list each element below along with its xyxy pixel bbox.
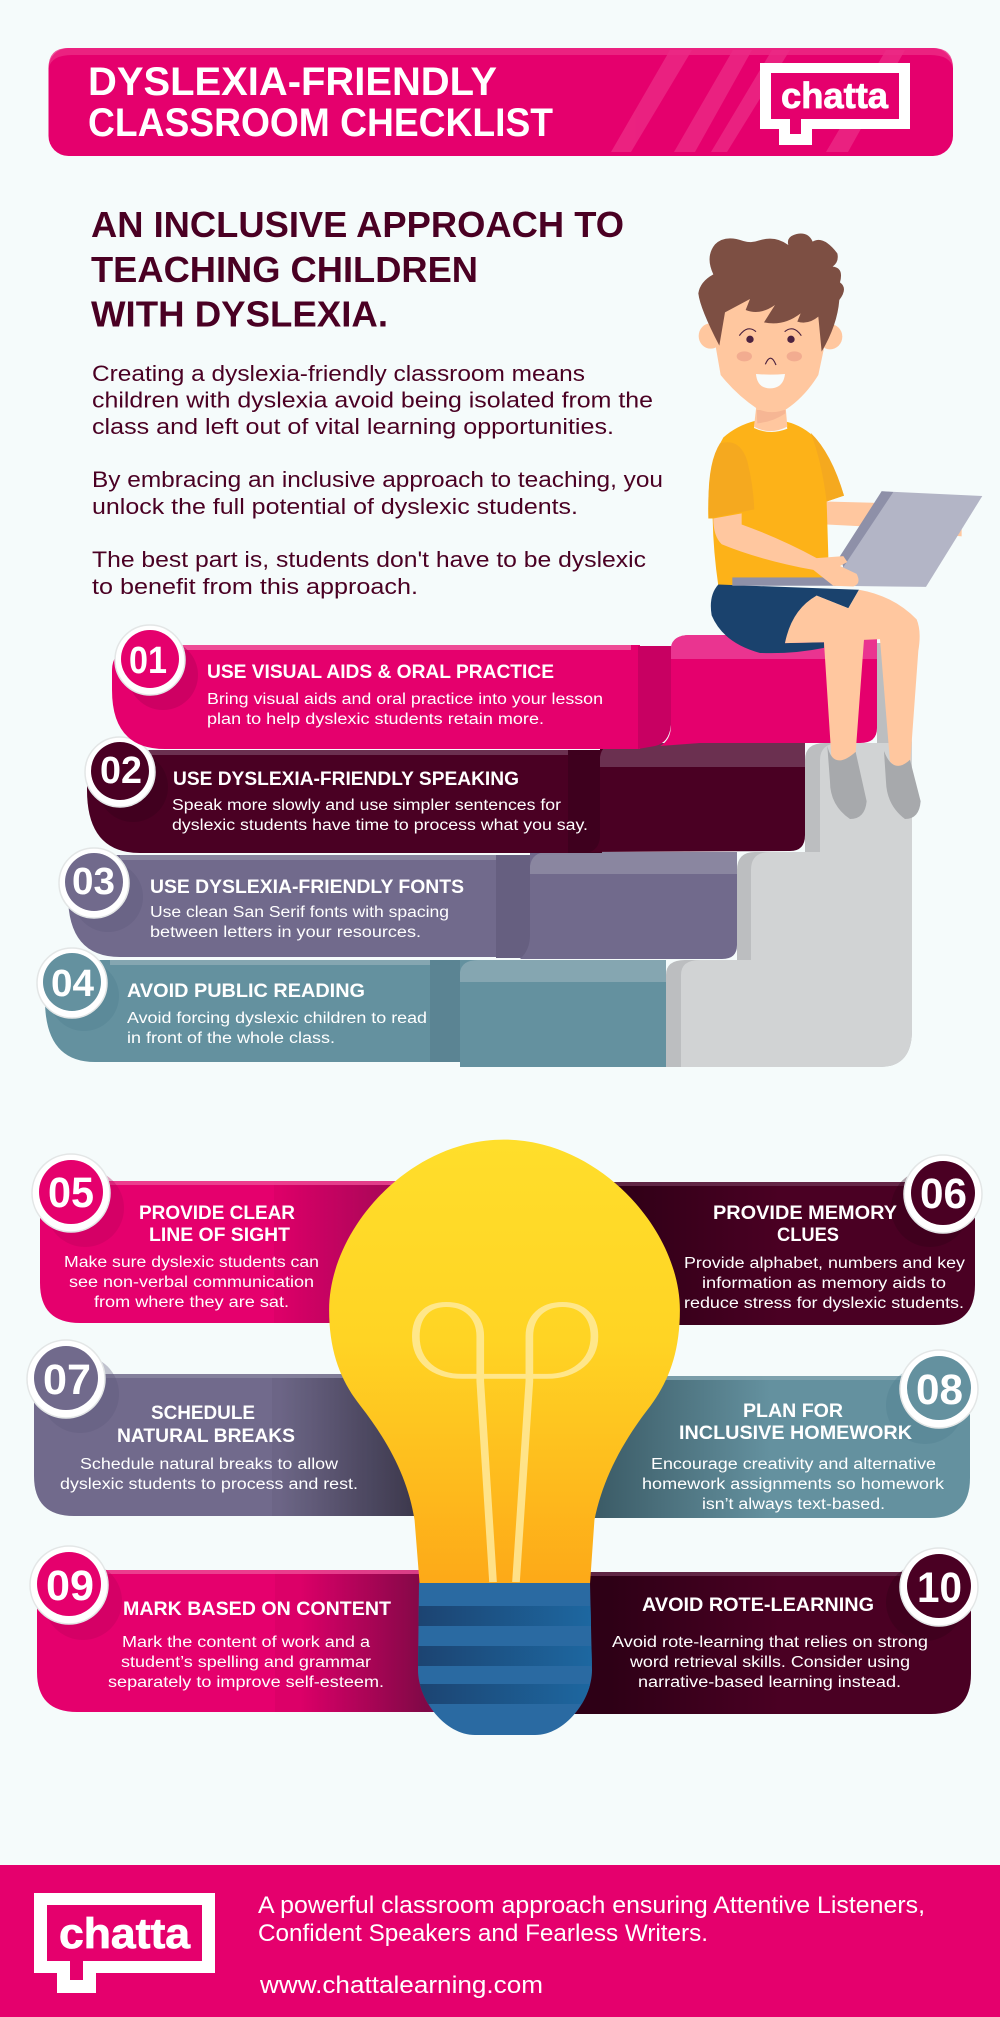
intro text: to benefit from this approach. [92, 574, 418, 599]
panel 08 text: Encourage creativity and alternative [651, 1456, 936, 1473]
panel 09 text: separately to improve self-esteem. [108, 1674, 384, 1691]
panel 10 text: AVOID ROTE-LEARNING [642, 1595, 874, 1616]
panel 09 text: Mark the content of work and a [122, 1634, 370, 1651]
step 01 text: plan to help dyslexic students retain more. [207, 711, 544, 728]
step 01 text [207, 662, 603, 728]
intro text: children with dyslexia avoid being isolated from the [92, 388, 653, 412]
chatta logo in banner [760, 63, 910, 145]
step 02: dyslexia-friendly speaking [85, 737, 805, 853]
panel 08 text [642, 1401, 944, 1513]
panel 07 text: NATURAL BREAKS [117, 1426, 295, 1447]
number badge 08: 08 [916, 1366, 963, 1414]
number badge 10: 10 [917, 1564, 962, 1612]
step 03: dyslexia-friendly fonts [59, 848, 737, 959]
panel 10: avoid rote-learning [560, 1548, 978, 1714]
number badge 02 [85, 737, 168, 822]
panel 07: natural breaks [27, 1340, 440, 1516]
main heading: TEACHING CHILDREN [91, 249, 478, 290]
step 02 text: Speak more slowly and use simpler sentences for [172, 797, 561, 814]
panel 05 text: Make sure dyslexic students can [64, 1254, 319, 1271]
panel 10 text: word retrieval skills. Consider using [629, 1654, 910, 1671]
panel 06 text: PROVIDE MEMORY [713, 1203, 897, 1224]
number badge 09 [30, 1546, 122, 1640]
panel 09: mark based on content [30, 1546, 450, 1712]
panel 06 text: Provide alphabet, numbers and key [684, 1255, 965, 1272]
number badge 06 [891, 1155, 982, 1247]
intro text: By embracing an inclusive approach to teaching, you [92, 467, 663, 492]
bulb glass [329, 1140, 680, 1585]
number badge 06: 06 [920, 1170, 967, 1218]
header banner [48, 48, 953, 156]
number badge 02: 02 [100, 750, 142, 792]
footer website: www.chattalearning.com [259, 1972, 543, 1999]
chatta logo in banner: chatta [781, 75, 889, 116]
panel 08: inclusive homework [560, 1350, 978, 1518]
step 01: visual aids and oral practice [112, 625, 877, 749]
boy illustration [698, 234, 982, 819]
panel 06 text: reduce stress for dyslexic students. [684, 1295, 964, 1312]
intro text: Creating a dyslexia-friendly classroom means [92, 361, 585, 386]
footer tagline [258, 1892, 925, 1947]
number badge 01 [115, 625, 198, 710]
panel 09 text: student’s spelling and grammar [121, 1654, 371, 1671]
step 01 text: USE VISUAL AIDS & ORAL PRACTICE [207, 662, 554, 683]
panel 10 text: Avoid rote-learning that relies on strong [612, 1634, 928, 1651]
chatta logo in footer: chatta [59, 1910, 191, 1958]
panel 07 text: dyslexic students to process and rest. [60, 1476, 358, 1493]
step 03 text [150, 877, 464, 941]
boy body [708, 421, 982, 819]
step 02 text [172, 769, 588, 834]
chatta logo in footer [34, 1893, 215, 1993]
step 04 text: Avoid forcing dyslexic children to read [127, 1010, 427, 1027]
number badge 07: 07 [43, 1356, 91, 1404]
panel 07 text: SCHEDULE [151, 1403, 255, 1424]
panel 10 text [612, 1595, 928, 1691]
step 04 text [127, 981, 427, 1047]
panel 06 text: CLUES [777, 1225, 839, 1246]
intro text: class and left out of vital learning opportunities. [92, 414, 614, 439]
main heading: AN INCLUSIVE APPROACH TO [91, 204, 624, 245]
panel 06 text: information as memory aids to [702, 1275, 946, 1292]
footer tagline: A powerful classroom approach ensuring Attentive Listeners, [258, 1892, 925, 1919]
footer [0, 1865, 1000, 2017]
number badge 01: 01 [129, 640, 167, 682]
banner title: DYSLEXIA-FRIENDLY [88, 60, 497, 104]
panel 07 text [60, 1403, 358, 1493]
step 01 text: Bring visual aids and oral practice into your lesson [207, 691, 603, 708]
banner title: CLASSROOM CHECKLIST [88, 101, 553, 145]
panel 10 text: narrative-based learning instead. [638, 1674, 901, 1691]
main heading: WITH DYSLEXIA. [91, 294, 388, 334]
number badge 10 [886, 1548, 978, 1641]
panel 05 text: from where they are sat. [94, 1294, 289, 1311]
step 03 text: USE DYSLEXIA-FRIENDLY FONTS [150, 877, 464, 898]
panel 06: memory clues [580, 1155, 982, 1325]
footer tagline: Confident Speakers and Fearless Writers. [258, 1920, 708, 1947]
number badge 04 [37, 948, 119, 1031]
panel 09 text [108, 1599, 391, 1691]
number badge 04: 04 [51, 963, 94, 1005]
number badge 05 [32, 1154, 124, 1247]
number badge 03: 03 [72, 861, 115, 903]
number badge 08 [886, 1350, 978, 1444]
light bulb [329, 1140, 680, 1738]
panel 08 text: isn’t always text-based. [702, 1496, 885, 1513]
intro text: unlock the full potential of dyslexic students. [92, 494, 578, 519]
step 02 text: dyslexic students have time to process what you say. [172, 817, 588, 834]
panel 05: clear line of sight [32, 1154, 420, 1323]
boy head [698, 234, 844, 431]
panel 07 text: Schedule natural breaks to allow [80, 1456, 339, 1473]
panel 05 text: PROVIDE CLEAR [139, 1203, 295, 1224]
panel 09 text: MARK BASED ON CONTENT [123, 1599, 391, 1620]
step 03 text: between letters in your resources. [150, 924, 421, 941]
panel 08 text: INCLUSIVE HOMEWORK [679, 1423, 912, 1444]
step 03 text: Use clean San Serif fonts with spacing [150, 904, 449, 921]
number badge 03 [59, 848, 143, 932]
panel 05 text: see non-verbal communication [69, 1274, 314, 1291]
filament [416, 1305, 594, 1582]
intro text [92, 361, 663, 599]
number badge 07 [27, 1340, 119, 1433]
step 04 text: AVOID PUBLIC READING [127, 981, 365, 1002]
bulb base [418, 1583, 592, 1735]
number badge 05: 05 [48, 1169, 94, 1217]
step 04 text: in front of the whole class. [127, 1030, 335, 1047]
panel 08 text: PLAN FOR [743, 1401, 843, 1422]
main heading [91, 204, 624, 334]
panel 05 text: LINE OF SIGHT [149, 1225, 290, 1246]
step 02 text: USE DYSLEXIA-FRIENDLY SPEAKING [173, 769, 519, 790]
grey stairs [666, 643, 912, 1067]
number badge 09: 09 [46, 1562, 94, 1610]
panel 06 text [684, 1203, 965, 1312]
panel 08 text: homework assignments so homework [642, 1476, 944, 1493]
panel 05 text [64, 1203, 319, 1311]
intro text: The best part is, students don't have to be dyslexic [92, 547, 646, 572]
step 04: avoid public reading [37, 948, 666, 1067]
banner title [88, 60, 553, 145]
